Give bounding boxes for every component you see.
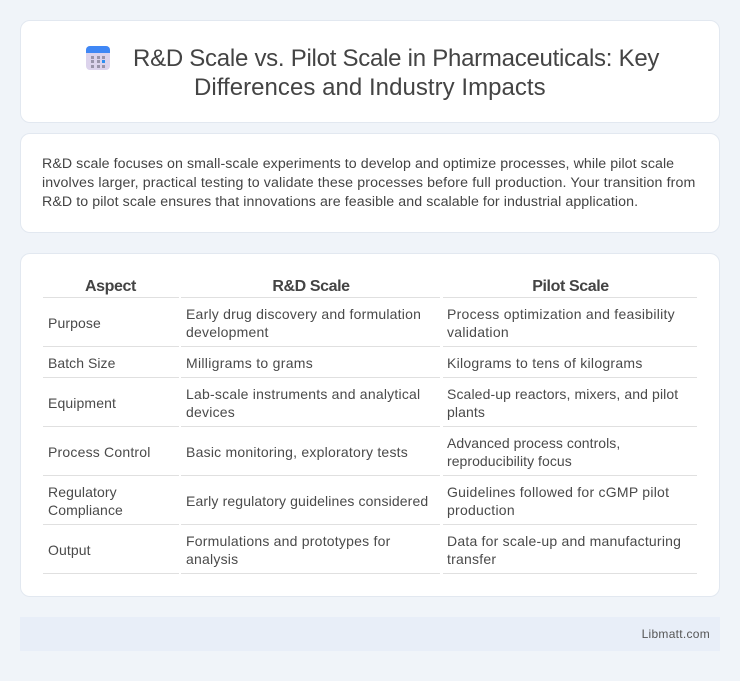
row: regulatory compliance: Guidelines followed for cGMP pilot bbox=[447, 484, 669, 500]
footer attribution: Libmatt.com bbox=[642, 627, 710, 641]
row: equipment: Equipment bbox=[48, 395, 116, 411]
panel: introduction bbox=[20, 133, 720, 233]
row: purpose: development bbox=[186, 324, 269, 340]
row: purpose bbox=[48, 306, 675, 340]
row: output: Data for scale-up and manufacturing bbox=[447, 533, 681, 549]
row: purpose: validation bbox=[447, 324, 509, 340]
row: output: Formulations and prototypes for bbox=[186, 533, 390, 549]
row: process control: Basic monitoring, exploratory tests bbox=[186, 444, 408, 460]
row: purpose: Purpose bbox=[48, 315, 101, 331]
title text: R&D Scale vs. Pilot Scale in Pharmaceuticals: Key bbox=[133, 45, 659, 72]
row: output: Output bbox=[48, 542, 91, 558]
title text: Differences and Industry Impacts bbox=[194, 74, 546, 101]
title text bbox=[133, 45, 660, 101]
row: output: analysis bbox=[186, 551, 238, 567]
row: output bbox=[48, 533, 681, 567]
row: batch size: Batch Size bbox=[48, 355, 115, 371]
row: regulatory compliance bbox=[48, 484, 669, 518]
row: equipment: devices bbox=[186, 404, 235, 420]
table header: Pilot Scale bbox=[532, 278, 609, 295]
row: batch size: Milligrams to grams bbox=[186, 355, 313, 371]
table header: R&D Scale bbox=[272, 278, 350, 295]
intro text: R&D scale focuses on small-scale experiments to develop and optimize processes, while pilot scale bbox=[42, 156, 674, 172]
row: process control: reproducibility focus bbox=[447, 453, 572, 469]
footer bbox=[20, 617, 720, 651]
intro text bbox=[42, 156, 695, 210]
intro text: R&D to pilot scale ensures that innovations are feasible and scalable for industrial application. bbox=[42, 194, 638, 210]
row: equipment bbox=[48, 386, 678, 420]
row: equipment: plants bbox=[447, 404, 485, 420]
row: equipment: Scaled-up reactors, mixers, and pilot bbox=[447, 386, 678, 402]
row: regulatory compliance: production bbox=[447, 502, 515, 518]
row: batch size: Kilograms to tens of kilograms bbox=[447, 355, 643, 371]
row: process control: Process Control bbox=[48, 444, 151, 460]
row: regulatory compliance: Compliance bbox=[48, 502, 123, 518]
row: regulatory compliance: Early regulatory guidelines considered bbox=[186, 493, 428, 509]
row: process control bbox=[48, 435, 620, 469]
icon: calendar bbox=[86, 46, 110, 70]
panel: title bbox=[20, 20, 720, 123]
row: output: transfer bbox=[447, 551, 496, 567]
row: batch size bbox=[48, 355, 643, 371]
intro text: involves larger, practical testing to validate these processes before full production. Your transition from bbox=[42, 175, 695, 191]
row: equipment: Lab-scale instruments and analytical bbox=[186, 386, 420, 402]
row: purpose: Process optimization and feasibility bbox=[447, 306, 675, 322]
table header bbox=[85, 278, 609, 295]
row: regulatory compliance: Regulatory bbox=[48, 484, 117, 500]
row: purpose: Early drug discovery and formulation bbox=[186, 306, 421, 322]
panel: comparison table bbox=[20, 253, 720, 597]
table header: Aspect bbox=[85, 278, 136, 295]
row: process control: Advanced process controls, bbox=[447, 435, 620, 451]
